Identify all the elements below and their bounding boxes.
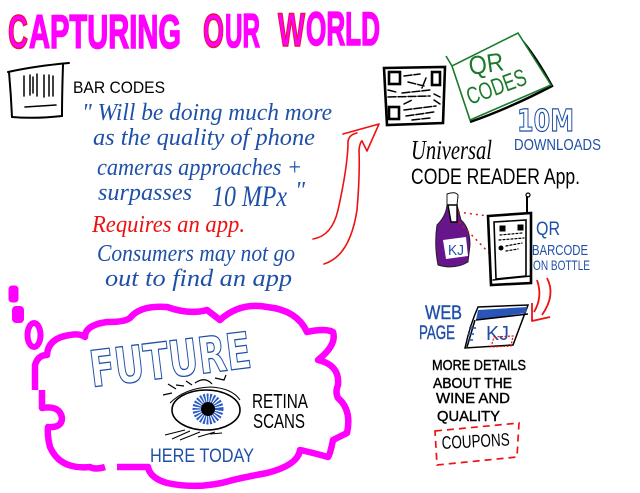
label: qr barcode on bottle: ON BOTTLE xyxy=(533,257,590,273)
quote text: surpasses xyxy=(98,180,192,206)
thought cloud xyxy=(10,287,348,486)
title xyxy=(8,2,380,58)
coupons callout: COUPONS xyxy=(441,429,510,453)
red dotted lines from bottle to phone xyxy=(458,212,494,258)
icon: bar code xyxy=(8,63,69,118)
arrow: phone to web page xyxy=(532,278,551,321)
label: web page xyxy=(419,303,462,344)
heading: future: FUTURE xyxy=(86,322,254,399)
stat: 10M downloads xyxy=(514,104,601,154)
quote text: cameras approaches + xyxy=(97,155,302,181)
panel: qr codes label xyxy=(446,33,552,122)
quote text: 10 MPx xyxy=(212,180,288,213)
title: ORLD xyxy=(306,2,380,55)
icon: eye xyxy=(163,375,240,440)
text: more details: QUALITY xyxy=(437,408,500,425)
quote text: " Will be doing much more xyxy=(82,100,332,126)
panel: qr codes label: CODES xyxy=(463,64,530,111)
coupons callout xyxy=(435,423,519,465)
label: qr barcode on bottle xyxy=(532,219,590,273)
heading: universal code reader app: Universal xyxy=(411,135,492,165)
text: more details xyxy=(432,357,526,425)
quote text: " xyxy=(295,178,306,204)
title: O xyxy=(203,4,224,57)
stat: 10M downloads: DOWNLOADS xyxy=(514,137,601,154)
label: retina scans: RETINA xyxy=(252,391,309,413)
label: qr barcode on bottle: QR xyxy=(536,219,560,240)
icon: wine bottle: KJ xyxy=(448,242,464,259)
label: here today: HERE TODAY xyxy=(150,446,254,467)
label: retina scans xyxy=(252,391,309,433)
title: W xyxy=(278,3,305,56)
title: UR xyxy=(225,4,260,57)
title: APTURING xyxy=(29,5,181,58)
label: qr barcode on bottle: BARCODE xyxy=(532,242,588,259)
label: retina scans: SCANS xyxy=(253,411,305,433)
icon: web page xyxy=(465,305,528,348)
consumers text xyxy=(97,241,295,292)
heading: universal code reader app: CODE READER App. xyxy=(411,164,580,189)
quote text xyxy=(82,100,332,213)
text: more details: MORE DETAILS xyxy=(432,357,526,374)
title: C xyxy=(8,5,28,58)
icon: web page: KJ xyxy=(486,323,509,345)
quote text: as the quality of phone xyxy=(93,125,315,151)
icon: qr code xyxy=(384,67,445,125)
arrow: red curved arrow xyxy=(313,124,379,264)
text: more details: ABOUT THE xyxy=(433,375,512,392)
consumers text: out to find an app xyxy=(105,266,292,292)
label: web page: WEB xyxy=(425,303,462,324)
icon: phone with qr code xyxy=(488,193,531,285)
red note: requires an app: Requires an app. xyxy=(91,212,245,238)
heading: bar codes: BAR CODES xyxy=(73,78,165,97)
label: web page: PAGE xyxy=(419,323,455,344)
icon: wine bottle xyxy=(436,193,470,267)
stat: 10M downloads: 10M xyxy=(517,104,574,139)
heading: universal code reader app xyxy=(411,135,580,189)
consumers text: Consumers may not go xyxy=(97,241,295,267)
panel: qr codes label: QR xyxy=(467,46,505,81)
text: more details: WINE AND xyxy=(436,390,510,407)
